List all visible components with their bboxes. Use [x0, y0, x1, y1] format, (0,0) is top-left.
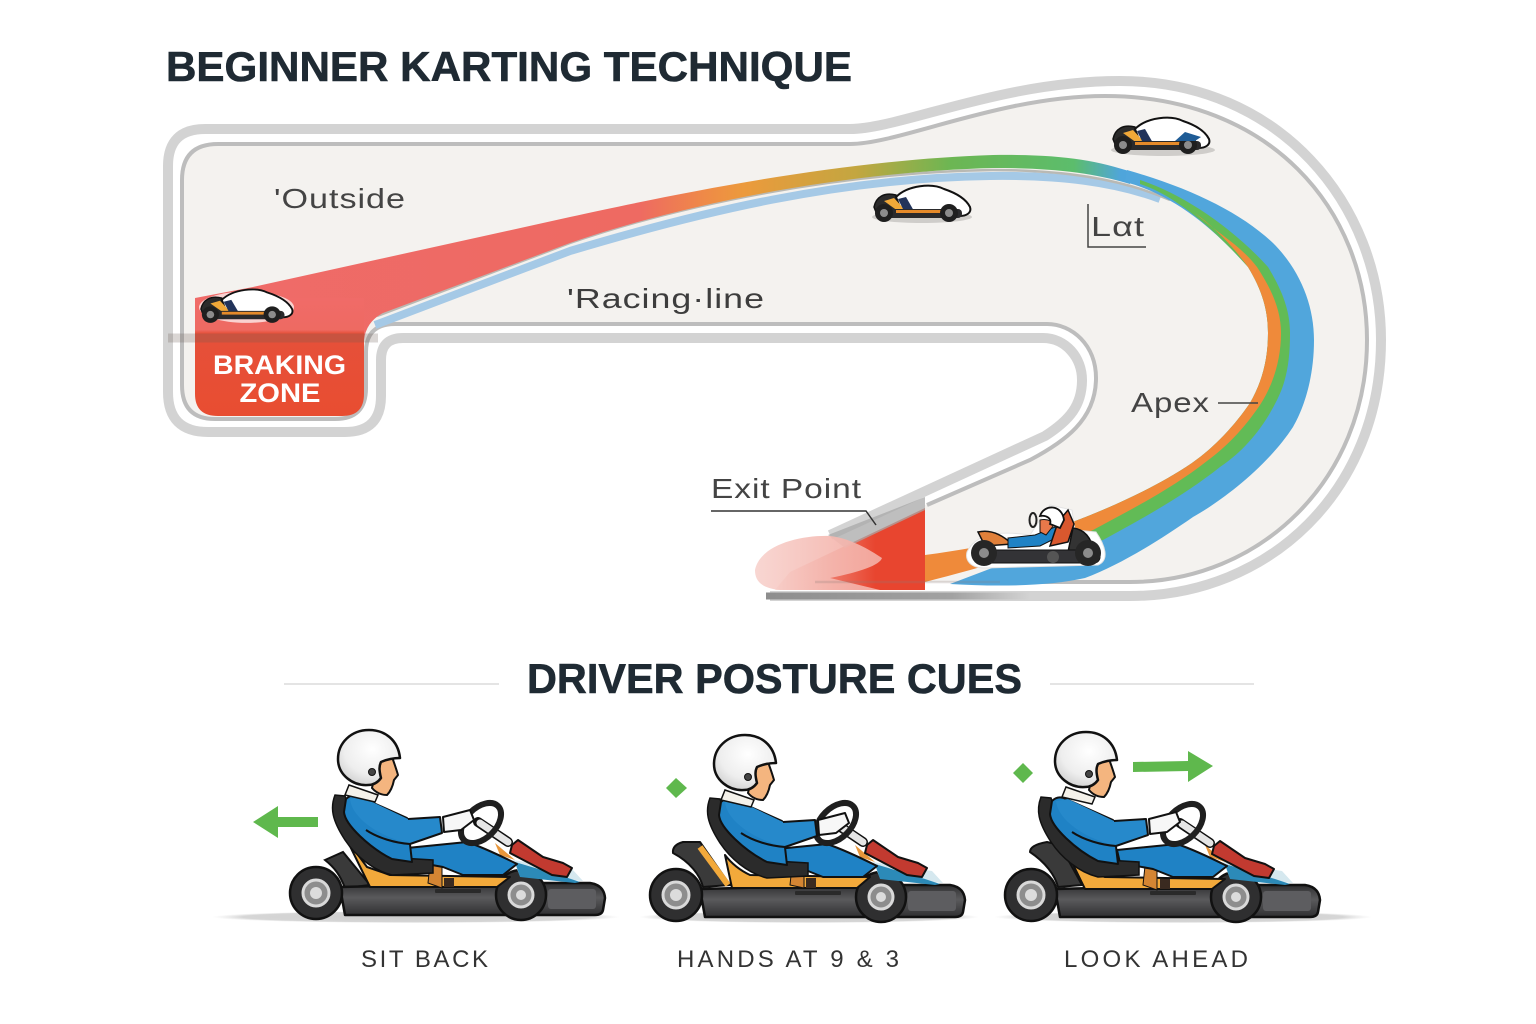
green arrow pointing back — [253, 806, 318, 838]
kart — [650, 735, 965, 922]
label: apex with leader — [1131, 387, 1258, 418]
track surface — [182, 96, 1367, 582]
exit motion blur — [755, 536, 882, 590]
panel: sit back — [212, 730, 620, 973]
kart at turn-in — [872, 186, 972, 223]
outer track border band — [168, 81, 1381, 596]
racing line: blue outer band — [950, 170, 1314, 586]
braking zone label — [213, 350, 346, 408]
caption: HANDS AT 9 & 3 — [677, 946, 899, 973]
light blue secondary line — [375, 176, 1160, 325]
kart at exit with driver — [967, 505, 1105, 568]
braking zone label: BRAKING — [213, 350, 346, 380]
braking zone block — [195, 298, 364, 416]
label: lat with bracket — [1088, 204, 1146, 247]
kart — [290, 730, 605, 920]
panel: race track diagram — [168, 81, 1381, 596]
caption: LOOK AHEAD — [1064, 946, 1248, 973]
kart on outside — [1111, 118, 1215, 156]
ground shadow — [994, 911, 1372, 923]
band crossing braking zone — [168, 334, 378, 342]
green arrow pointing ahead — [1133, 751, 1213, 782]
exit wedge dark band tip — [828, 497, 925, 548]
kart on braking zone — [199, 290, 294, 323]
label: racing line: 'Racing·line — [567, 283, 765, 314]
heading: driver posture cues: DRIVER POSTURE CUES — [527, 655, 1022, 702]
green diamond — [666, 778, 687, 798]
label: apex with leader: Apex — [1131, 387, 1210, 418]
bottom straight shaded band — [766, 592, 1030, 600]
grey shadow below ribbon — [377, 170, 1170, 316]
thin edge through exit zone — [815, 581, 1000, 583]
racing line: green middle band — [1045, 180, 1290, 556]
title: Beginner Karting Technique: BEGINNER KARTING TECHNIQUE — [166, 43, 852, 90]
green diamond — [1013, 763, 1033, 783]
panel: look ahead — [994, 732, 1372, 973]
label: lat with bracket: Lαt — [1091, 211, 1145, 242]
kart — [1005, 732, 1320, 922]
exit point red wedge — [775, 508, 925, 590]
panel: hands at 9 and 3 — [639, 735, 979, 973]
inner track edge line — [182, 96, 1367, 582]
ground shadow — [212, 911, 620, 923]
racing line ribbon: braking to turn-in — [195, 155, 1132, 340]
label: outside: 'Outside — [274, 183, 406, 214]
ground shadow — [639, 911, 979, 923]
label: exit point with leader: Exit Point — [711, 473, 862, 504]
braking zone label: ZONE — [240, 378, 320, 408]
label: exit point with leader — [711, 473, 876, 525]
caption: SIT BACK — [361, 946, 488, 973]
racing line: orange inner band — [925, 213, 1281, 582]
